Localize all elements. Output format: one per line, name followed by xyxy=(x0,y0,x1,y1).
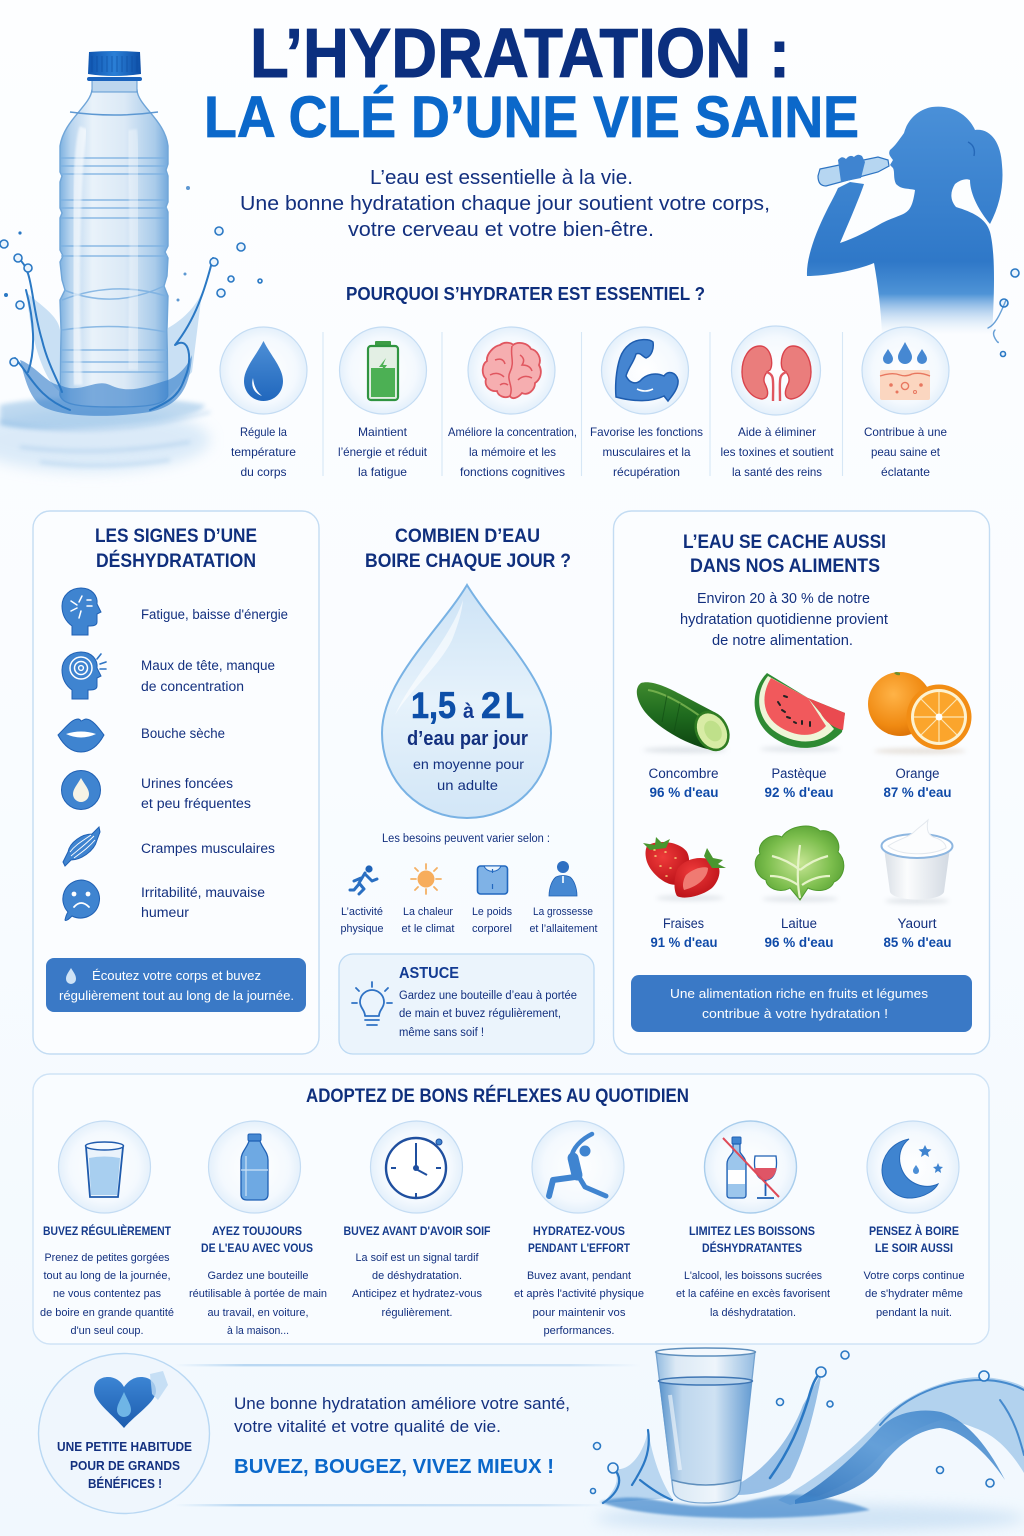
factor: grossesse xyxy=(530,861,598,935)
habit: le soir: PENSEZ À BOIRE xyxy=(869,1225,959,1238)
badge: petite habitude: UNE PETITE HABITUDE xyxy=(57,1439,192,1454)
heading: POURQUOI S’HYDRATER EST ESSENTIEL ? xyxy=(346,284,705,304)
heading: DÉSHYDRATATION xyxy=(96,550,256,572)
benefit: température xyxy=(220,327,307,479)
box: astuce: Gardez une bouteille d’eau à portée xyxy=(399,990,577,1002)
food: fraises: 91 % d'eau xyxy=(650,935,718,950)
benefit: peau: peau saine et xyxy=(871,445,941,459)
factor: poids xyxy=(472,866,512,935)
habit: boissons déshydratantes: et la caféine en excès favorisent xyxy=(676,1288,830,1300)
big water drop: en moyenne pour xyxy=(413,756,524,772)
badge: petite habitude: BÉNÉFICES ! xyxy=(88,1476,162,1491)
callout: écoutez votre corps: Écoutez votre corps et buvez xyxy=(92,968,261,983)
box: astuce xyxy=(339,954,594,1054)
sign: urines: et peu fréquentes xyxy=(141,796,251,811)
habit: buvez régulièrement: d'un seul coup. xyxy=(70,1325,144,1337)
factor: chaleur: La chaleur xyxy=(403,906,453,918)
benefit: muscles: Favorise les fonctions xyxy=(590,425,703,439)
icon: light bulb xyxy=(352,982,392,1025)
benefit: cerveau: fonctions cognitives xyxy=(460,465,565,479)
illustration: water bottle with splash xyxy=(0,51,262,472)
food: orange: 87 % d'eau xyxy=(884,785,952,800)
habit: pendant l'effort xyxy=(514,1121,644,1337)
habit: pendant l'effort: HYDRATEZ-VOUS xyxy=(533,1226,625,1238)
food: fraises: Fraises xyxy=(663,916,704,931)
benefit: peau: éclatante xyxy=(881,465,930,479)
benefit: peau xyxy=(862,327,949,479)
habit: buvez régulièrement: BUVEZ RÉGULIÈREMENT xyxy=(43,1225,171,1238)
intro: de notre alimentation. xyxy=(712,633,853,649)
title: LA CLÉ D’UNE VIE SAINE xyxy=(204,85,859,150)
food: laitue: Laitue xyxy=(781,916,817,931)
food: yaourt: 85 % d'eau xyxy=(884,935,952,950)
food: pastèque: Pastèque xyxy=(772,766,826,781)
habit: ayez toujours: AYEZ TOUJOURS xyxy=(212,1226,302,1238)
habit: avant d'avoir soif: Anticipez et hydratez-vous xyxy=(352,1288,482,1300)
habit: buvez régulièrement: ne vous contentez pas xyxy=(53,1288,161,1300)
quantity: L xyxy=(505,685,524,726)
sign: crampes xyxy=(63,827,275,866)
sign: urines: Urines foncées xyxy=(141,776,233,791)
benefit: muscles: récupération xyxy=(613,465,680,479)
box: astuce: de main et buvez régulièrement, xyxy=(399,1008,561,1020)
sign: irritabilité: humeur xyxy=(141,905,190,920)
sign: maux de tête: de concentration xyxy=(141,679,244,694)
benefit: énergie xyxy=(338,327,428,479)
panel: bons réflexes xyxy=(33,1074,989,1344)
heading: BOIRE CHAQUE JOUR ? xyxy=(365,551,571,572)
food: laitue xyxy=(755,826,844,950)
intro text: votre cerveau et votre bien-être. xyxy=(348,218,654,241)
panel: combien d'eau xyxy=(339,526,598,1054)
factor: chaleur xyxy=(402,864,454,935)
food: concombre xyxy=(637,682,735,800)
illustration: woman drinking xyxy=(807,107,1019,357)
sign: fatigue: Fatigue, baisse d'énergie xyxy=(141,607,288,622)
factor: chaleur: et le climat xyxy=(402,923,454,935)
section: pourquoi s'hydrater xyxy=(220,284,949,479)
sign: urines xyxy=(62,770,251,811)
intro: hydratation quotidienne provient xyxy=(680,612,888,628)
habit: pendant l'effort: performances. xyxy=(544,1325,614,1337)
benefit: reins xyxy=(720,326,834,479)
habit: buvez régulièrement xyxy=(40,1121,174,1337)
big water drop xyxy=(382,585,551,818)
benefit: température: Régule la xyxy=(240,425,287,439)
callout: alimentation: contribue à votre hydratation ! xyxy=(702,1006,888,1021)
habit: le soir xyxy=(864,1121,964,1319)
caption: Les besoins peuvent varier selon : xyxy=(382,833,550,845)
sign: irritabilité: Irritabilité, mauvaise xyxy=(141,885,265,900)
habit: boissons déshydratantes: DÉSHYDRATANTES xyxy=(702,1242,802,1255)
heading: LES SIGNES D’UNE xyxy=(95,526,257,547)
habit: le soir: LE SOIR AUSSI xyxy=(875,1243,953,1255)
habit: le soir: pendant la nuit. xyxy=(876,1307,952,1319)
habit: buvez régulièrement: tout au long de la journée, xyxy=(44,1270,170,1282)
illustration: glass of water with splash xyxy=(590,1348,1024,1532)
sign: maux de tête xyxy=(62,652,275,699)
box: astuce: même sans soif ! xyxy=(399,1027,484,1039)
icon: heart with drop xyxy=(94,1371,168,1428)
heading: COMBIEN D’EAU xyxy=(395,526,540,547)
glass xyxy=(656,1352,755,1503)
intro text: L’eau est essentielle à la vie. xyxy=(370,166,633,189)
habit: le soir: Votre corps continue xyxy=(864,1270,964,1282)
quantity xyxy=(411,685,524,726)
food: concombre: 96 % d'eau xyxy=(650,785,718,800)
benefit: cerveau: Améliore la concentration, xyxy=(448,425,577,439)
habit: pendant l'effort: et après l'activité physique xyxy=(514,1288,644,1300)
heading xyxy=(683,532,886,577)
factor: grossesse: La grossesse xyxy=(533,906,593,918)
factor: grossesse: et l’allaitement xyxy=(530,923,598,935)
sign: crampes: Crampes musculaires xyxy=(141,841,275,856)
big water drop: un adulte xyxy=(437,777,498,793)
habit: buvez régulièrement: de boire en grande quantité xyxy=(40,1307,174,1319)
habit: pendant l'effort: PENDANT L'EFFORT xyxy=(528,1243,630,1255)
quantity: 1,5 xyxy=(411,685,456,726)
habit: avant d'avoir soif: BUVEZ AVANT D'AVOIR SOIF xyxy=(344,1226,490,1238)
panel: l'eau dans les aliments xyxy=(614,511,990,1054)
food: laitue: 96 % d'eau xyxy=(764,935,834,950)
habit: avant d'avoir soif: de déshydratation. xyxy=(372,1270,462,1282)
badge: petite habitude xyxy=(38,1354,210,1514)
habit: avant d'avoir soif xyxy=(344,1121,490,1319)
habit: avant d'avoir soif: régulièrement. xyxy=(382,1307,452,1319)
habit: boissons déshydratantes: LIMITEZ LES BOISSONS xyxy=(689,1226,815,1238)
benefit: température: température xyxy=(231,445,296,459)
benefit: énergie: Maintient xyxy=(358,425,408,439)
habit: ayez toujours: DE L'EAU AVEC VOUS xyxy=(201,1243,313,1255)
benefit: cerveau: la mémoire et les xyxy=(469,445,556,459)
habit: pendant l'effort: pour maintenir vos xyxy=(532,1307,626,1319)
closing message: Une bonne hydratation améliore votre santé, xyxy=(234,1395,570,1413)
habit: boissons déshydratantes: L'alcool, les boissons sucrées xyxy=(684,1270,822,1282)
sign: fatigue xyxy=(62,588,288,635)
factor: poids: corporel xyxy=(472,923,512,935)
panel: signes de déshydratation xyxy=(33,511,319,1054)
sign: irritabilité xyxy=(63,880,265,920)
habit: boissons déshydratantes xyxy=(676,1121,830,1319)
food: fraises xyxy=(643,837,726,950)
intro xyxy=(680,591,888,649)
quantity: à xyxy=(463,700,474,723)
factor: activité: L’activité xyxy=(341,906,383,918)
benefit: reins: la santé des reins xyxy=(732,465,822,479)
callout: écoutez votre corps: régulièrement tout au long de la journée. xyxy=(59,989,294,1003)
benefit: muscles: musculaires et la xyxy=(602,445,691,459)
benefit: énergie: la fatigue xyxy=(358,465,407,479)
habit: boissons déshydratantes: la déshydratation. xyxy=(710,1307,796,1319)
benefit: température: du corps xyxy=(240,465,286,479)
heading: ADOPTEZ DE BONS RÉFLEXES AU QUOTIDIEN xyxy=(306,1085,689,1107)
benefit: reins: les toxines et soutient xyxy=(720,445,834,459)
food: pastèque: 92 % d'eau xyxy=(764,785,834,800)
habit: avant d'avoir soif: La soif est un signal tardif xyxy=(356,1252,479,1264)
callout: écoutez votre corps xyxy=(46,958,306,1012)
intro text xyxy=(240,166,770,241)
food: pastèque xyxy=(755,673,845,800)
intro: Environ 20 à 30 % de notre xyxy=(697,591,870,607)
factor: poids: Le poids xyxy=(472,906,512,918)
habit: pendant l'effort: Buvez avant, pendant xyxy=(527,1270,631,1282)
box: astuce: ASTUCE xyxy=(399,965,459,982)
heading: L’EAU SE CACHE AUSSI xyxy=(683,532,886,553)
benefit: reins: Aide à éliminer xyxy=(738,425,816,439)
factor: activité: physique xyxy=(340,923,384,935)
callout: alimentation xyxy=(631,975,972,1032)
sign: bouche sèche: Bouche sèche xyxy=(141,726,225,741)
habit: ayez toujours: Gardez une bouteille xyxy=(208,1270,308,1282)
big water drop: d’eau par jour xyxy=(407,728,528,750)
title: L’HYDRATATION : xyxy=(250,14,790,92)
intro text: Une bonne hydratation chaque jour soutient votre corps, xyxy=(240,192,770,215)
food: concombre: Concombre xyxy=(648,766,718,781)
closing message xyxy=(234,1395,570,1478)
quantity: 2 xyxy=(481,685,501,726)
habit: ayez toujours xyxy=(189,1121,327,1337)
habit: le soir: de s'hydrater même xyxy=(865,1288,963,1300)
benefit: énergie: l’énergie et réduit xyxy=(338,445,428,459)
benefit: muscles xyxy=(590,327,703,479)
food: yaourt: Yaourt xyxy=(898,916,937,931)
sign: bouche sèche xyxy=(58,719,225,752)
habit: ayez toujours: réutilisable à portée de main xyxy=(189,1288,327,1300)
factor: activité xyxy=(340,865,384,935)
callout: alimentation: Une alimentation riche en fruits et légumes xyxy=(670,986,929,1001)
heading xyxy=(95,526,257,572)
badge: petite habitude: POUR DE GRANDS xyxy=(70,1458,180,1473)
heading: DANS NOS ALIMENTS xyxy=(690,556,880,577)
food: yaourt xyxy=(882,820,952,950)
food: orange xyxy=(868,672,972,800)
habit: ayez toujours: à la maison... xyxy=(227,1325,289,1337)
closing message: BUVEZ, BOUGEZ, VIVEZ MIEUX ! xyxy=(234,1455,554,1478)
benefit: peau: Contribue à une xyxy=(864,425,947,439)
habit: buvez régulièrement: Prenez de petites gorgées xyxy=(44,1252,170,1264)
title xyxy=(204,14,859,150)
closing message: votre vitalité et votre qualité de vie. xyxy=(234,1418,501,1436)
benefit: cerveau xyxy=(448,327,577,479)
wave xyxy=(778,1377,1024,1505)
sign: maux de tête: Maux de tête, manque xyxy=(141,658,275,673)
heading xyxy=(365,526,571,572)
habit: ayez toujours: au travail, en voiture, xyxy=(208,1307,308,1319)
food: orange: Orange xyxy=(896,766,940,781)
